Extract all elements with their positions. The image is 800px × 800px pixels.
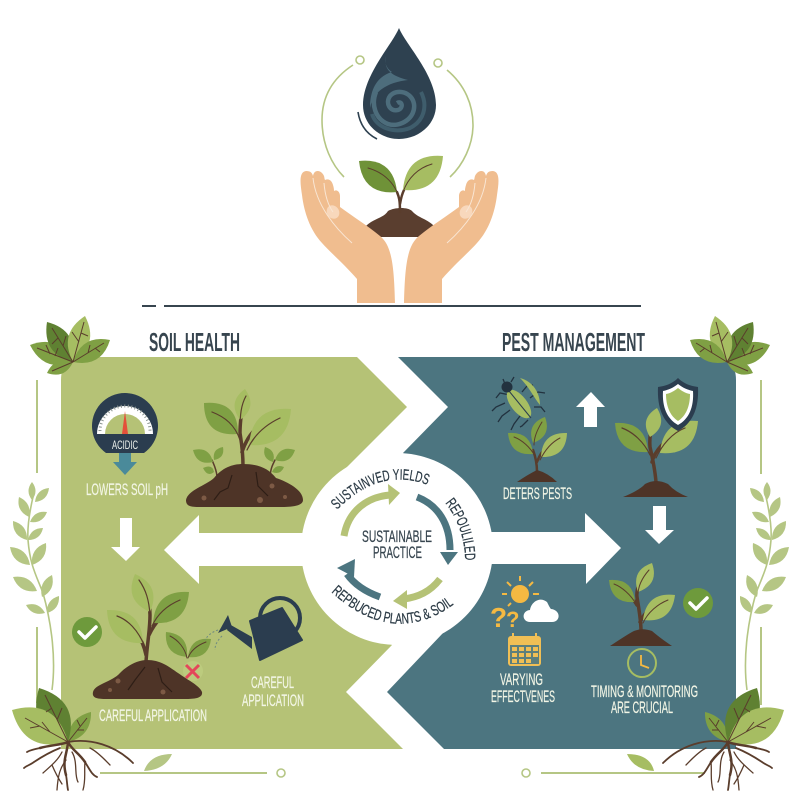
decoration: bottom-left rule and leaf [100,754,285,777]
panel background green [61,357,407,749]
icon: orbit arcs [322,56,473,177]
center text: SUSTAINABLE [362,527,432,546]
heading: soil health: SOIL HEALTH [149,327,240,357]
plant: bottom-right rooted plant [663,688,784,790]
icon: question marks [490,602,519,633]
icon: question marks: ? [490,602,507,633]
text: lowers soil ph: LOWERS SOIL pH [86,480,168,499]
icon: sun [502,576,539,606]
decoration: top-left leaf cluster [30,316,110,375]
decoration: bottom-right rule and leaf [522,754,705,777]
decoration: left side rules [36,380,38,703]
cycle arrowheads [337,484,458,609]
top rule [142,305,641,307]
plant: monitored plant [609,563,675,646]
decoration: top-right leaf cluster [690,316,770,375]
icon: left hand [301,171,395,303]
arrow: right to pest management [470,513,621,584]
icon: sprout [359,156,443,237]
icon: right hand [404,171,498,303]
arrow: up white [576,392,605,427]
icon: calendar [508,633,541,666]
panel: soil health [61,357,407,749]
panel: pest management [387,357,736,749]
panel background teal [387,357,736,749]
text: deters pests: DETERS PESTS [503,484,572,503]
text: timing and monitoring: ARE CRUCIAL [611,698,673,717]
cycle label: repoulled: REPOULILED [446,497,476,560]
icon: cloud [524,600,559,622]
center text [362,527,432,562]
icon: dark water drop with swirl [358,28,436,139]
central hub: sustainable practice cycle [302,453,492,645]
icon: check badge [72,617,102,647]
text: varying effectiveness: VARYING [500,670,543,689]
arrow: down white [111,518,140,561]
icon: check badge right [683,588,713,618]
cycle arrows [344,495,450,599]
icon: acidic gauge [92,393,158,453]
cycle label: reduced plants and soil: REPBUCED PLANTS & SOIL [332,584,454,624]
icon: red cross [183,661,203,681]
icon: shield [658,378,698,431]
text: careful application right: APPLICATION [242,691,304,710]
text: timing and monitoring: TIMING & MONITORING [591,682,698,701]
decoration: left vine [10,482,59,690]
text: varying effectiveness [491,670,555,706]
text: careful application left: CAREFUL APPLICATION [99,706,207,725]
gauge label: ACIDIC [112,438,138,452]
center text: PRACTICE [373,543,422,562]
plant: bottom-left rooted plant [12,688,133,790]
hub circle [301,453,493,645]
arrow: left to soil health [164,515,330,584]
heading: pest management: PEST MANAGEMENT [502,327,645,357]
text: timing and monitoring [591,682,698,717]
decoration: right side rules [760,380,762,705]
text: varying effectiveness: EFFECTVENES [491,687,555,706]
text: careful application right [242,673,304,710]
icon: beetle [492,377,545,430]
plant: shielded plant [615,408,698,497]
plant: sprout deterring pests [508,417,567,482]
icon: clock [628,649,656,677]
hero: water drop, sprout and hands [301,28,498,303]
cycle label: sustained yields: SUSTAINVED YIELDS [331,469,430,509]
text: careful application right: CAREFUL [251,673,294,692]
plant: healthy plant in soil [186,389,303,507]
plant: plant with small sprout [93,574,211,699]
arrow: down white right [645,506,674,544]
decoration: right vine [740,482,789,690]
icon: watering can [205,598,302,660]
icon: question marks: ? [506,607,519,632]
icon: down arrow lower ph [113,453,137,475]
